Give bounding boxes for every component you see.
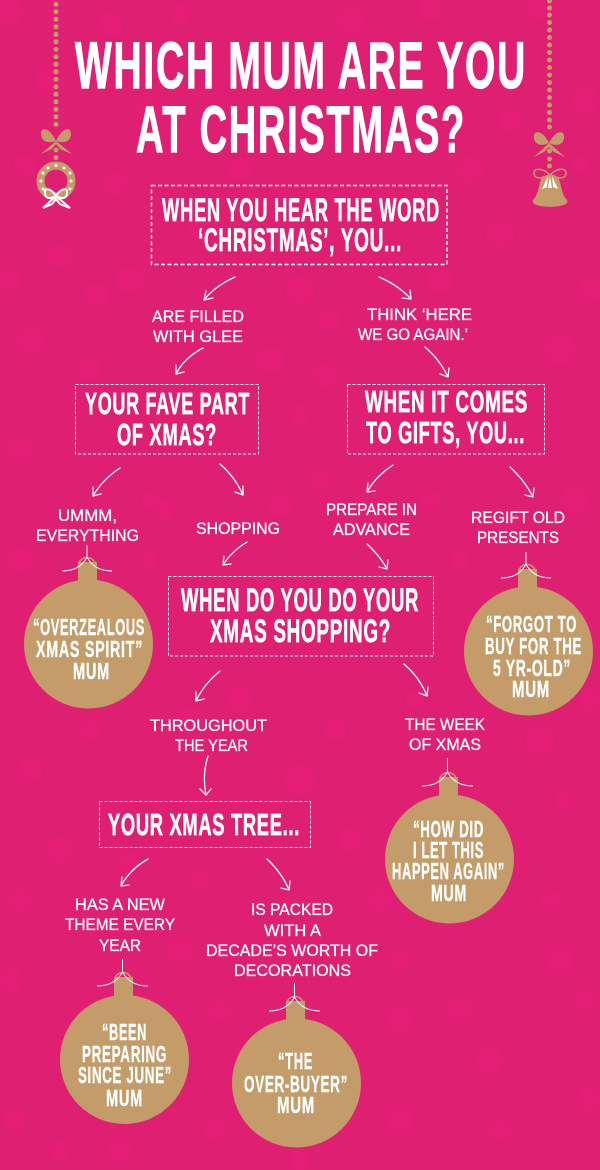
label: think here we go again xyxy=(358,305,472,344)
arrow xyxy=(267,859,290,890)
label: are filled with glee: WITH GLEE xyxy=(153,327,243,346)
label: think here we go again: WE GO AGAIN.’ xyxy=(358,325,468,344)
ornament: how did i let this happen again mum: “HOW DID xyxy=(413,816,484,842)
question box: your fave part of xmas: YOUR FAVE PART xyxy=(85,386,250,421)
label: regift old presents: PRESENTS xyxy=(477,528,559,547)
arrow xyxy=(425,347,449,377)
arrow xyxy=(404,664,428,696)
arrow xyxy=(220,464,243,495)
label: regift old presents: REGIFT OLD xyxy=(471,508,565,527)
label: has a new theme every year: THEME EVERY xyxy=(65,915,175,934)
label: is packed with a decade's worth of decorations: IS PACKED xyxy=(251,900,333,919)
arrow xyxy=(196,671,220,701)
arrow xyxy=(223,542,247,565)
label: are filled with glee: ARE FILLED xyxy=(152,307,244,326)
label: the week of xmas: OF XMAS xyxy=(409,735,481,754)
arrow xyxy=(121,859,148,886)
arrow xyxy=(204,277,235,300)
question box: your fave part of xmas: OF XMAS? xyxy=(117,417,217,452)
arrow xyxy=(200,756,211,795)
arrow xyxy=(379,277,411,299)
arrow xyxy=(367,544,388,569)
label: the week of xmas: THE WEEK xyxy=(405,715,486,734)
label: throughout the year: THROUGHOUT xyxy=(150,716,267,735)
ornament: overzealous xmas spirit mum xyxy=(24,545,153,708)
arrow xyxy=(176,348,203,374)
label: ummm everything: EVERYTHING xyxy=(36,526,139,545)
ornament: how did i let this happen again mum xyxy=(385,758,514,924)
ornament: overzealous xmas spirit mum: “OVERZEALOUS xyxy=(33,614,145,640)
label: think here we go again: THINK ‘HERE xyxy=(367,305,472,324)
label: throughout the year xyxy=(150,716,267,755)
ornament: forgot to buy for the 5 yr-old mum: MUM xyxy=(512,676,550,702)
ornament: been preparing since june mum: PREPARING xyxy=(82,1041,167,1067)
ornament: been preparing since june mum xyxy=(60,959,189,1124)
question box: when you hear the word christmas: ‘CHRISTMAS’, YOU... xyxy=(198,222,402,258)
question box: when do you do your xmas shopping: XMAS SHOPPING? xyxy=(210,613,391,649)
label: is packed with a decade's worth of decorations: DECORATIONS xyxy=(234,961,351,980)
ornament: how did i let this happen again mum: MUM xyxy=(431,880,467,906)
ornament: overzealous xmas spirit mum: XMAS SPIRIT” xyxy=(36,636,143,662)
label: has a new theme every year: HAS A NEW xyxy=(75,895,165,914)
question box: your xmas tree: YOUR XMAS TREE... xyxy=(108,807,300,842)
label: is packed with a decade's worth of decorations: DECADE’S WORTH OF xyxy=(206,941,378,960)
ornament: the over-buyer mum: “THE xyxy=(278,1048,313,1074)
question box: when you hear the word christmas xyxy=(152,186,447,264)
label: the week of xmas xyxy=(405,715,486,754)
arrow xyxy=(93,468,120,496)
arrow xyxy=(510,467,534,497)
ornament: the over-buyer mum: MUM xyxy=(277,1092,315,1118)
icon: hanging wreath ornament xyxy=(40,2,72,208)
question box: your fave part of xmas xyxy=(76,384,258,454)
label: has a new theme every year: YEAR xyxy=(99,936,141,955)
label: is packed with a decade's worth of decorations xyxy=(206,900,378,980)
ornament: been preparing since june mum: “BEEN xyxy=(102,1019,147,1045)
label: prepare in advance: ADVANCE xyxy=(333,520,410,539)
label: prepare in advance xyxy=(326,500,417,539)
ornament: overzealous xmas spirit mum: MUM xyxy=(73,658,110,684)
ornament: been preparing since june mum: SINCE JUNE” xyxy=(78,1062,172,1088)
arrow xyxy=(367,465,393,492)
question box: when do you do your xmas shopping: WHEN DO YOU DO YOUR xyxy=(181,582,419,618)
label: are filled with glee xyxy=(152,307,244,346)
label: throughout the year: THE YEAR xyxy=(175,736,248,755)
label: is packed with a decade's worth of decorations: WITH A xyxy=(264,921,322,940)
question box: when it comes to gifts xyxy=(348,384,544,454)
ornament: the over-buyer mum: OVER-BUYER” xyxy=(244,1071,348,1097)
label: ummm everything xyxy=(36,506,139,545)
question box: your xmas tree xyxy=(100,802,310,848)
label: ummm everything: UMMM, xyxy=(58,506,117,525)
label: shopping: SHOPPING xyxy=(196,519,280,538)
label: prepare in advance: PREPARE IN xyxy=(326,500,417,519)
icon: hanging bell ornament xyxy=(533,0,567,207)
ornament: the over-buyer mum xyxy=(232,983,361,1148)
title xyxy=(75,28,527,166)
label: has a new theme every year xyxy=(65,895,175,955)
question box: when do you do your xmas shopping xyxy=(168,576,434,656)
ornament: forgot to buy for the 5 yr-old mum xyxy=(464,552,593,716)
label: regift old presents xyxy=(471,508,565,547)
ornament: how did i let this happen again mum: HAPPEN AGAIN” xyxy=(392,858,505,884)
ornament: been preparing since june mum: MUM xyxy=(106,1085,143,1111)
ornament: how did i let this happen again mum: I LET THIS xyxy=(413,837,484,863)
